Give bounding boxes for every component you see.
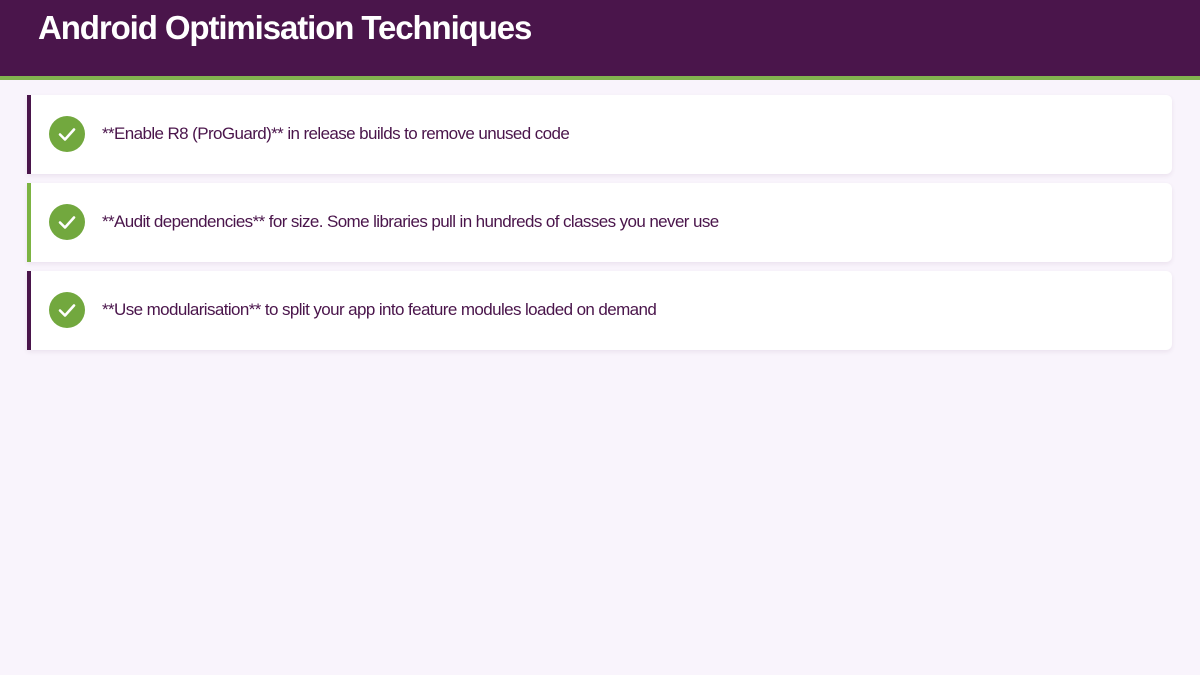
card 3 bbox=[27, 271, 1172, 350]
icon: check bbox=[49, 292, 85, 328]
title: Android Optimisation Techniques bbox=[38, 9, 531, 46]
header bbox=[0, 0, 1200, 80]
icon: check bbox=[49, 204, 85, 240]
card 2 bbox=[27, 183, 1172, 262]
text: **Audit dependencies** for size. Some libraries pull in hundreds of classes you never use bbox=[102, 212, 719, 231]
card 1 bbox=[27, 95, 1172, 174]
icon: check bbox=[49, 116, 85, 152]
text: **Use modularisation** to split your app into feature modules loaded on demand bbox=[102, 300, 656, 319]
text: **Enable R8 (ProGuard)** in release builds to remove unused code bbox=[102, 124, 569, 143]
